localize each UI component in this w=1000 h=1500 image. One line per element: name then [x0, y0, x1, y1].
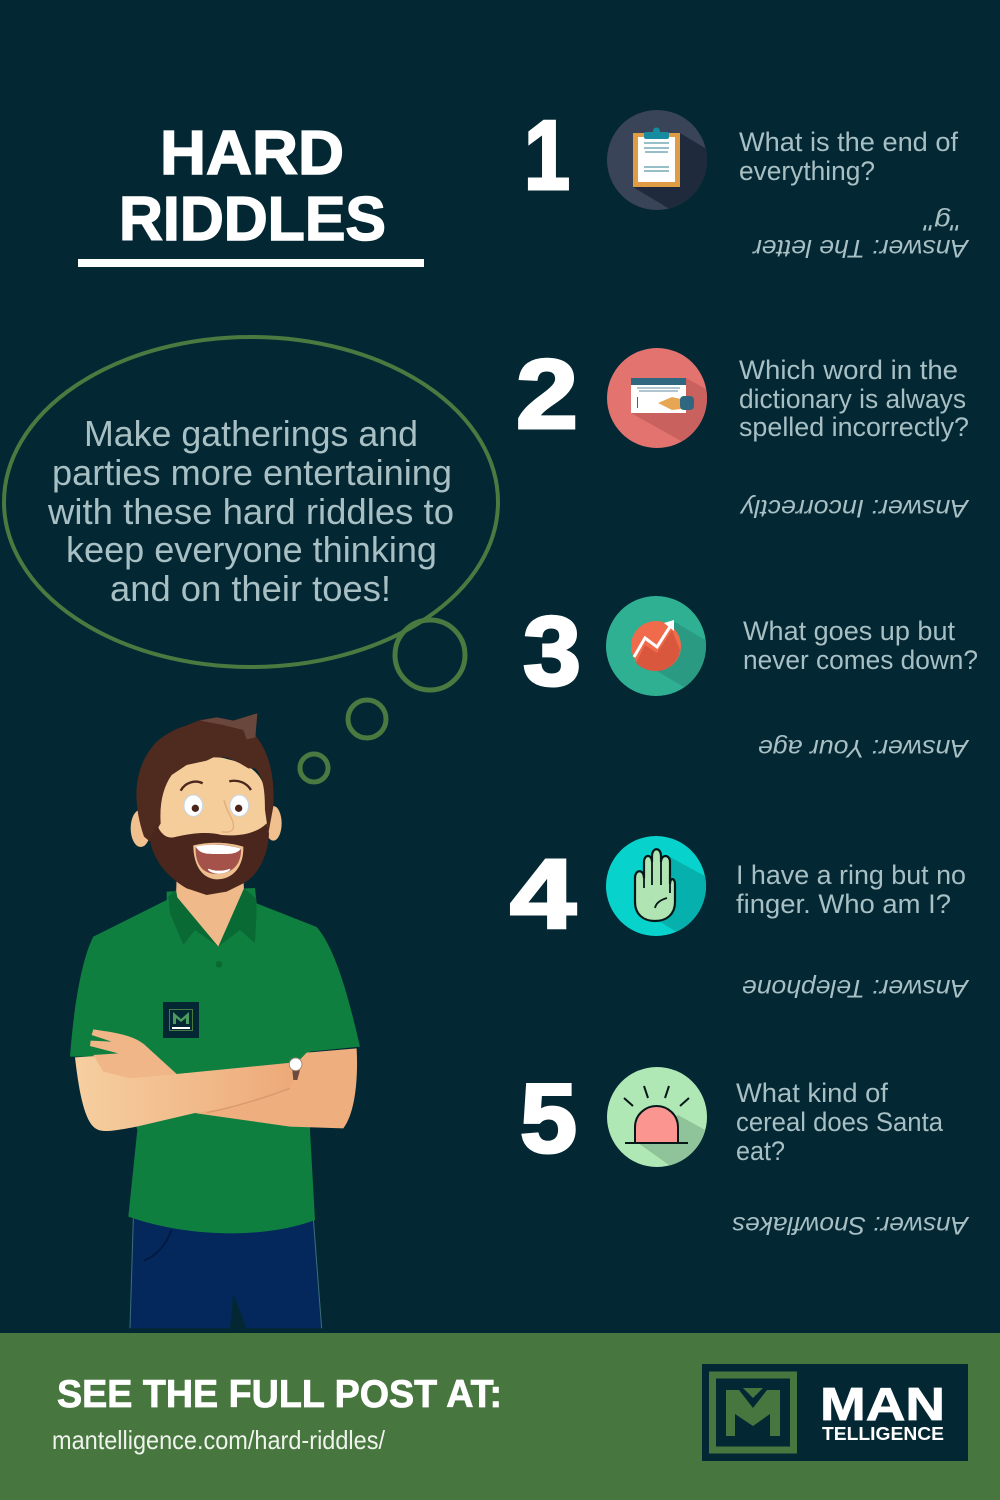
- riddle 1 question: [739, 127, 958, 186]
- footer heading: SEE THE FULL POST AT:: [57, 1373, 502, 1416]
- item 2: number: 2: [516, 339, 578, 449]
- pants: [130, 1218, 322, 1329]
- riddle 5 question: [736, 1078, 944, 1166]
- crossed arms: [75, 1029, 357, 1131]
- riddle 5 question: eat?: [736, 1136, 785, 1166]
- riddle 2 question: Which word in the: [739, 355, 958, 385]
- title: [78, 119, 424, 267]
- item 5: number: 5: [520, 1063, 577, 1173]
- riddle 5 answer, upside down: Answer: Snowflakes: [732, 1211, 970, 1239]
- icon: growth chart: [606, 596, 706, 696]
- item 4: number: 4: [510, 839, 576, 949]
- riddle 2 question: [739, 355, 969, 442]
- riddle 1 question: What is the end of: [739, 127, 958, 157]
- logo: MAN: [820, 1378, 945, 1430]
- item 1: number: 1: [524, 100, 570, 210]
- shirt badge: [163, 1002, 199, 1038]
- riddle 1 answer, upside down: Answer: The letter: [751, 234, 970, 262]
- riddle 1 answer, upside down: [751, 207, 970, 262]
- icon: clipboard: [607, 110, 707, 210]
- bubble text: keep everyone thinking: [66, 529, 437, 570]
- riddle 4 question: I have a ring but no: [736, 860, 966, 890]
- riddle 3 question: never comes down?: [743, 645, 978, 675]
- riddle 2 answer, upside down: Answer: Incorrectly: [739, 494, 970, 522]
- title: HARD: [160, 119, 344, 188]
- title: RIDDLES: [119, 185, 386, 254]
- bubble text: and on their toes!: [110, 568, 391, 609]
- logo: TELLIGENCE: [822, 1424, 944, 1444]
- shirt: [70, 888, 360, 1233]
- bubble text: [47, 413, 454, 609]
- character illustration: [70, 713, 360, 1329]
- neck and collar: [168, 877, 257, 947]
- head: [131, 713, 282, 895]
- footer url: mantelligence.com/hard-riddles/: [52, 1425, 386, 1455]
- bubble text: parties more entertaining: [52, 452, 452, 493]
- riddle 1 question: everything?: [739, 156, 875, 186]
- riddle 5 question: What kind of: [736, 1078, 888, 1108]
- logo: [702, 1364, 968, 1461]
- riddle 1 answer, upside down: "g": [923, 207, 961, 235]
- riddle 3 question: [743, 616, 978, 675]
- icon: raised hand: [606, 836, 706, 936]
- riddle 3 question: What goes up but: [743, 616, 955, 646]
- icon: alarm light: [607, 1067, 707, 1167]
- thought bubble: [4, 337, 498, 782]
- riddle 3 answer, upside down: Answer: Your age: [758, 734, 970, 762]
- bubble text: Make gatherings and: [84, 413, 418, 454]
- riddle 4 question: [736, 860, 966, 919]
- riddle 5 question: cereal does Santa: [736, 1107, 944, 1137]
- riddle 2 question: dictionary is always: [739, 384, 966, 414]
- bubble text: with these hard riddles to: [47, 491, 454, 532]
- icon: card and pen: [607, 348, 707, 448]
- footer band: [0, 1333, 1000, 1500]
- item 3: number: 3: [523, 596, 581, 706]
- riddle 4 question: finger. Who am I?: [736, 889, 951, 919]
- riddle 2 question: spelled incorrectly?: [739, 412, 969, 442]
- riddle 4 answer, upside down: Answer: Telephone: [742, 974, 970, 1002]
